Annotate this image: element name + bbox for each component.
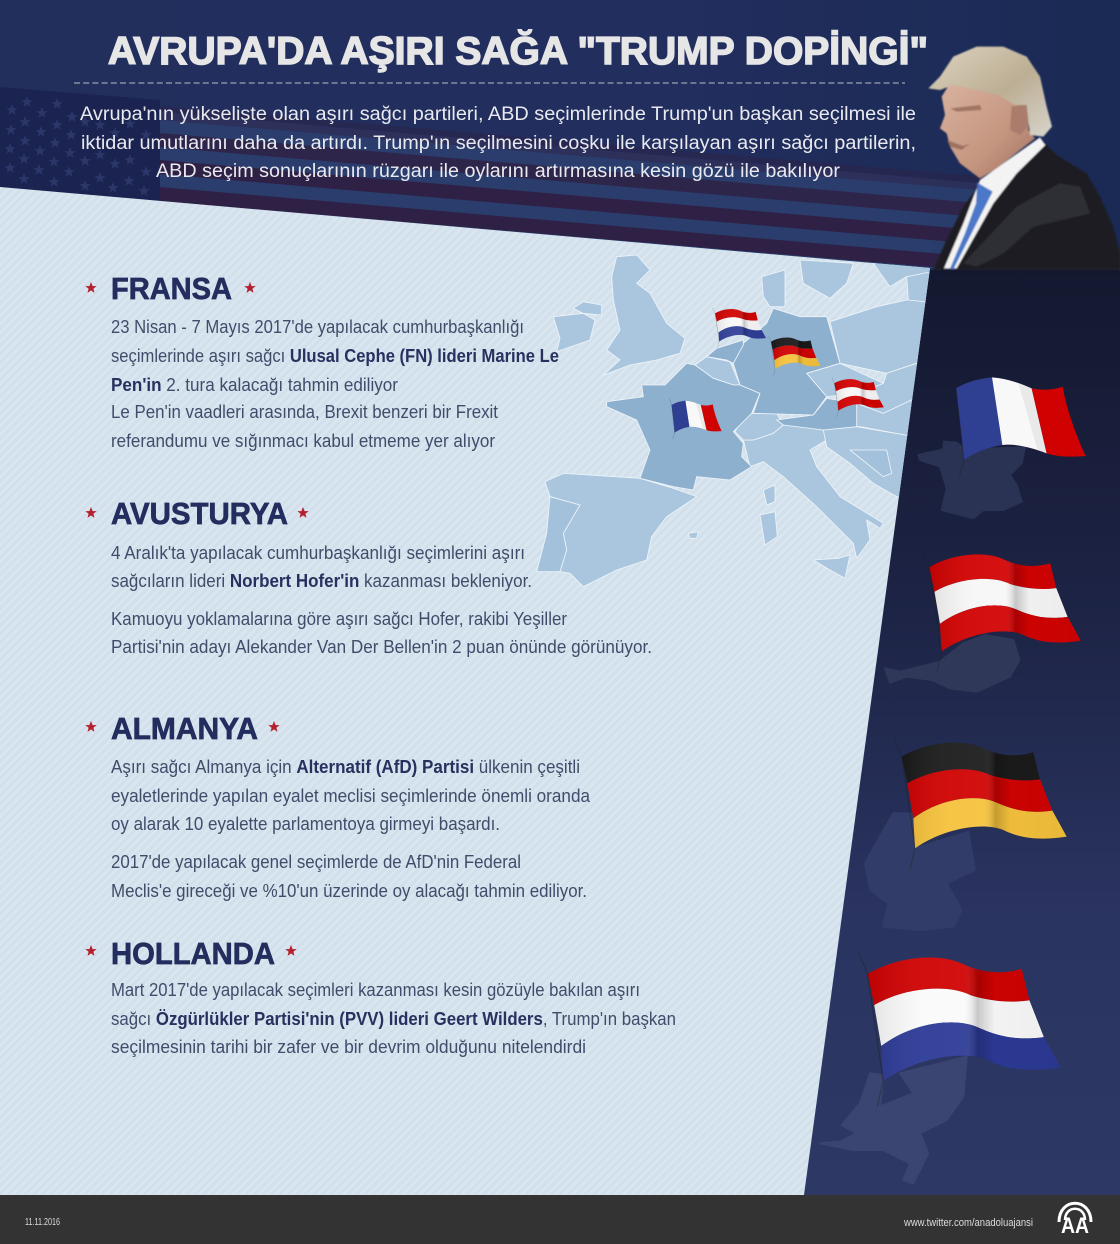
section: Hollanda [85, 936, 676, 1057]
section: Fransa: referandumu ve sığınmacı kabul etmeme yer alıyor [111, 431, 495, 451]
section: Fransa: Pen'in 2. tura kalacağı tahmin ediliyor [111, 375, 398, 395]
section: Almanya: ALMANYA [111, 711, 258, 746]
section: Hollanda: sağcı Özgürlükler Partisi'nin (PVV) lideri Geert Wilders, Trump'ın başkan [111, 1009, 676, 1029]
title: AVRUPA'DA AŞIRI SAĞA "TRUMP DOPİNGİ" [108, 29, 928, 73]
section: Almanya [85, 711, 591, 901]
large flag: Austria [922, 550, 1081, 671]
large flag: Germany [894, 738, 1067, 870]
intro text: ABD seçim sonuçlarının rüzgarı ile oylarını artırmasına kesin gözü ile bakılıyor [156, 161, 841, 182]
section: Hollanda: HOLLANDA [111, 936, 275, 971]
section: Avusturya [85, 496, 652, 657]
silhouette: France [918, 442, 1025, 518]
section: Fransa: FRANSA [111, 271, 232, 306]
panel: right dark [804, 270, 1120, 1195]
intro text [80, 104, 916, 182]
footer link: www.twitter.com/anadoluajansi [903, 1217, 1033, 1229]
section: Almanya: 2017'de yapılacak genel seçimlerde de AfD'nin Federal [111, 852, 521, 872]
panel: light content [0, 187, 930, 1195]
section: Avusturya: AVUSTURYA [111, 496, 288, 531]
silhouette: Netherlands [820, 1057, 967, 1183]
section: Almanya: oy alarak 10 eyalette parlamentoya girmeyi başardı. [111, 814, 500, 834]
section: Avusturya: 4 Aralık'ta yapılacak cumhurbaşkanlığı seçimlerini aşırı [111, 543, 525, 563]
section: Almanya: Aşırı sağcı Almanya için Alternatif (AfD) Partisi ülkenin çeşitli [111, 757, 580, 777]
section: Avusturya: Partisi'nin adayı Alekander Van Der Bellen'in 2 puan önünde görünüyor. [111, 637, 652, 657]
footer date: 11.11.2016 [25, 1217, 60, 1228]
section: Hollanda: seçilmesinin tarihi bir zafer ve bir devrim olduğunu nitelendirdi [111, 1037, 586, 1057]
logo: Anadolu Agency [1059, 1203, 1091, 1238]
footer bar [0, 1195, 1120, 1244]
intro text: Avrupa'nın yükselişte olan aşırı sağcı partileri, ABD seçimlerinde Trump'un başkan seçilmesi ile [80, 104, 916, 125]
map of europe [537, 250, 940, 587]
silhouette: Germany [865, 813, 975, 930]
section: Fransa: Le Pen'in vaadleri arasında, Brexit benzeri bir Frexit [111, 402, 498, 422]
section: Fransa: 23 Nisan - 7 Mayıs 2017'de yapılacak cumhurbaşkanlığı [111, 317, 524, 337]
logo: Anadolu Agency: AA [1061, 1213, 1089, 1238]
small flags on map [669, 308, 884, 439]
large flag: France [950, 372, 1086, 477]
header background [0, 0, 1120, 272]
section: Fransa [85, 271, 559, 451]
section: Hollanda: Mart 2017'de yapılacak seçimleri kazanması kesin gözüyle bakılan aşırı [111, 980, 640, 1000]
section: Almanya: Meclis'e gireceği ve %10'un üzerinde oy alacağı tahmin ediliyor. [111, 881, 587, 901]
intro text: iktidar umutlarını daha da artırdı. Trump'ın seçilmesini coşku ile karşılayan aşırı sağcı partilerin, [81, 133, 916, 154]
large flag: Netherlands [859, 952, 1061, 1106]
silhouette: Austria [885, 635, 1019, 692]
section: Avusturya: sağcıların lideri Norbert Hofer'in kazanması bekleniyor. [111, 571, 532, 591]
portrait: Trump [928, 47, 1120, 270]
american flag backdrop [0, 87, 979, 268]
section: Fransa: seçimlerinde aşırı sağcı Ulusal Cephe (FN) lideri Marine Le [111, 346, 559, 366]
section: Avusturya: Kamuoyu yoklamalarına göre aşırı sağcı Hofer, rakibi Yeşiller [111, 609, 567, 629]
section: Almanya: eyaletlerinde yapılan eyalet meclisi seçimlerinde önemli oranda [111, 786, 591, 806]
